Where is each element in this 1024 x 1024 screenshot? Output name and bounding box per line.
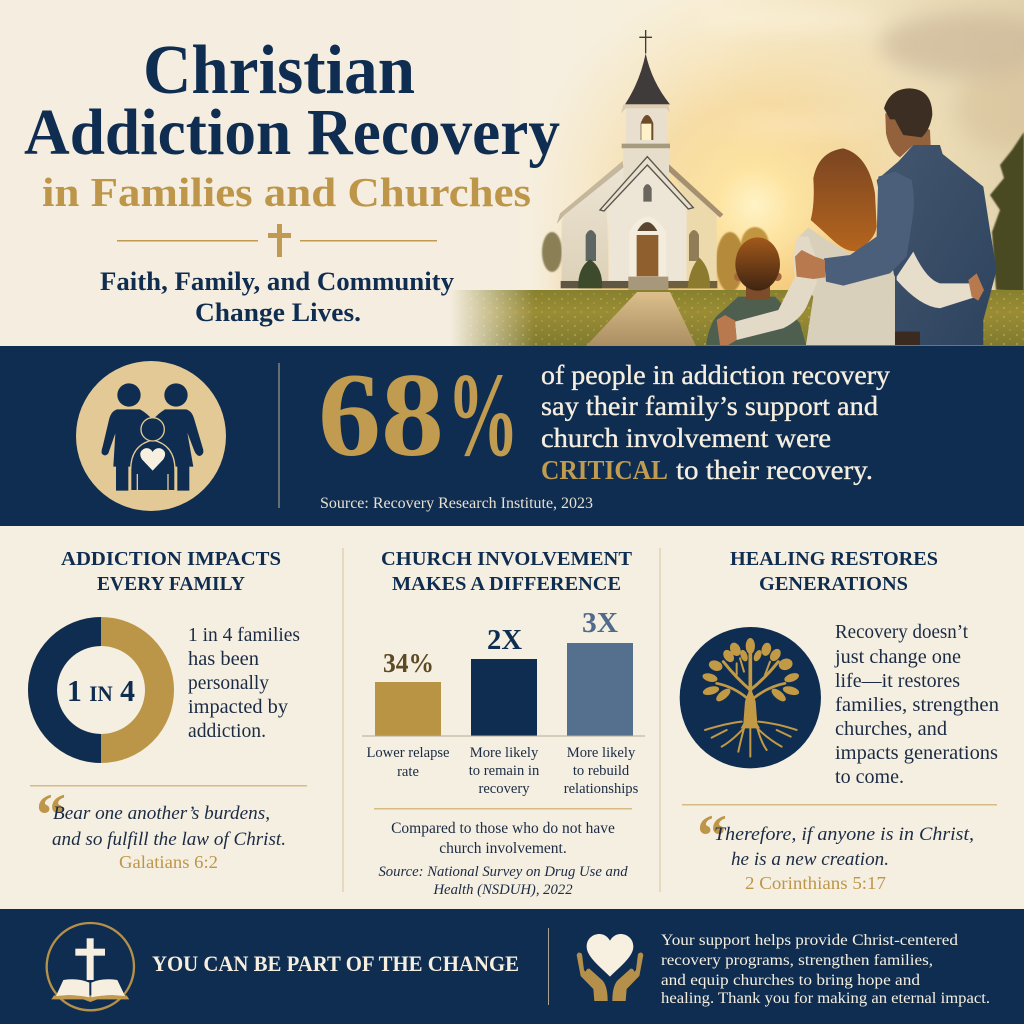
- tagline: Faith, Family, and Community: [100, 267, 454, 296]
- statistic description: of people in addiction recovery: [541, 359, 890, 390]
- bar chart: [362, 608, 645, 797]
- divider: [278, 363, 280, 508]
- support message: healing. Thank you for making an eternal impact.: [661, 990, 990, 1007]
- path: [586, 292, 696, 346]
- support message: Your support helps provide Christ-centered: [661, 932, 958, 949]
- support message: recovery programs, strengthen families,: [661, 952, 933, 969]
- heading: ADDICTION IMPACTS: [61, 548, 281, 570]
- text block: has been: [188, 648, 259, 670]
- statistic: 68%: 68: [318, 348, 444, 481]
- tagline: Change Lives.: [195, 298, 361, 327]
- chart source: Health (NSDUH), 2022: [432, 882, 573, 898]
- panel: church involvement: [362, 548, 645, 898]
- bar chart: to rebuild: [573, 763, 630, 779]
- boy: [706, 237, 806, 345]
- text block: life—it restores: [835, 671, 960, 692]
- bar chart: to remain in: [469, 763, 540, 779]
- call to action text: YOU CAN BE PART OF THE CHANGE: [152, 951, 519, 976]
- support message: and equip churches to bring hope and: [661, 972, 920, 989]
- bar chart: rate: [397, 764, 419, 780]
- heading: CHURCH INVOLVEMENT: [381, 548, 632, 570]
- panel: hero photo illustration: [0, 0, 1024, 346]
- heading: [381, 548, 632, 595]
- text block: addiction.: [188, 720, 266, 742]
- title cross divider: [117, 224, 437, 257]
- hands: [717, 250, 984, 345]
- heading: [730, 548, 938, 595]
- panel: key statistic band: [0, 346, 1024, 526]
- bar chart: 3X: [582, 608, 618, 639]
- bar chart: More likely: [470, 745, 539, 761]
- title: Addiction Recovery: [24, 96, 560, 169]
- support message: [661, 932, 990, 1007]
- bar chart: 34%: [383, 648, 434, 678]
- bar chart: Lower relapse: [366, 745, 450, 761]
- tagline: [100, 267, 454, 327]
- text block: impacted by: [188, 696, 288, 718]
- icon: background trees: [542, 132, 1024, 292]
- divider: [548, 928, 549, 1005]
- chart source: [378, 864, 628, 898]
- donut chart: 1 in 4: 1 IN 4: [67, 673, 135, 708]
- text block: 1 in 4 families: [188, 624, 300, 646]
- man: [877, 88, 997, 345]
- statistic: 68%: %: [447, 348, 519, 481]
- donut chart: 1 in 4: [28, 617, 160, 763]
- source: Source: Recovery Research Institute, 2023: [320, 495, 593, 512]
- text block: [834, 622, 999, 788]
- text block: to come.: [835, 767, 904, 788]
- callout: scripture quote: Bear one another’s burdens,: [53, 803, 270, 824]
- icon: hands holding heart: [577, 934, 643, 1001]
- bar chart: 2X: [487, 625, 522, 656]
- chart note: [391, 820, 615, 857]
- callout: scripture quote: “: [36, 782, 66, 848]
- heading: [61, 548, 281, 595]
- heading: HEALING RESTORES: [730, 548, 938, 570]
- callout: scripture quote: Therefore, if anyone is in Christ,: [714, 824, 974, 845]
- woman: [735, 148, 977, 345]
- panel: call to action footer: [0, 909, 1024, 1024]
- statistic description: to their recovery.: [676, 454, 873, 485]
- statistic description: [541, 359, 890, 485]
- callout: scripture quote: 2 Corinthians 5:17: [745, 873, 886, 893]
- statistic description: church involvement were: [541, 422, 831, 453]
- title: [24, 32, 560, 169]
- callout: scripture quote: and so fulfill the law of Christ.: [52, 829, 286, 850]
- statistic: 68%: [318, 348, 519, 481]
- text block: churches, and: [835, 719, 947, 740]
- man's arm: [824, 172, 914, 286]
- icon: tree of life: [680, 627, 821, 768]
- callout: scripture quote: [36, 782, 286, 872]
- statistic description: say their family’s support and: [541, 390, 878, 421]
- icon: family with heart: [76, 361, 226, 511]
- panel: healing restores generations: [680, 548, 999, 893]
- icon: church: [557, 30, 723, 290]
- chart source: Source: National Survey on Drug Use and: [378, 864, 628, 880]
- text block: personally: [188, 672, 269, 694]
- bar chart: recovery: [478, 781, 530, 797]
- text block: families, strengthen: [835, 695, 999, 716]
- chart note: Compared to those who do not have: [391, 820, 615, 837]
- icon: cross and open bible: [47, 923, 134, 1010]
- callout: scripture quote: he is a new creation.: [731, 849, 889, 870]
- subtitle: in Families and Churches: [42, 169, 531, 215]
- bar chart: relationships: [564, 781, 639, 797]
- statistic description: CRITICAL: [541, 454, 668, 485]
- heading: MAKES A DIFFERENCE: [392, 573, 621, 595]
- field: [440, 290, 1024, 346]
- chart note: church involvement.: [439, 840, 567, 857]
- callout: scripture quote: [697, 803, 974, 893]
- text block: just change one: [834, 647, 961, 668]
- title: Christian: [143, 32, 415, 109]
- column dividers: [342, 548, 660, 892]
- callout: scripture quote: Galatians 6:2: [119, 852, 218, 872]
- text block: impacts generations: [835, 743, 998, 764]
- heading: GENERATIONS: [759, 573, 908, 595]
- bar chart: More likely: [567, 745, 636, 761]
- panel: addiction impacts every family: [28, 548, 307, 872]
- text block: [188, 624, 300, 742]
- callout: scripture quote: “: [697, 803, 727, 869]
- icon: family seen from behind: [706, 88, 997, 345]
- text block: Recovery doesn’t: [835, 622, 969, 643]
- heading: EVERY FAMILY: [97, 573, 245, 595]
